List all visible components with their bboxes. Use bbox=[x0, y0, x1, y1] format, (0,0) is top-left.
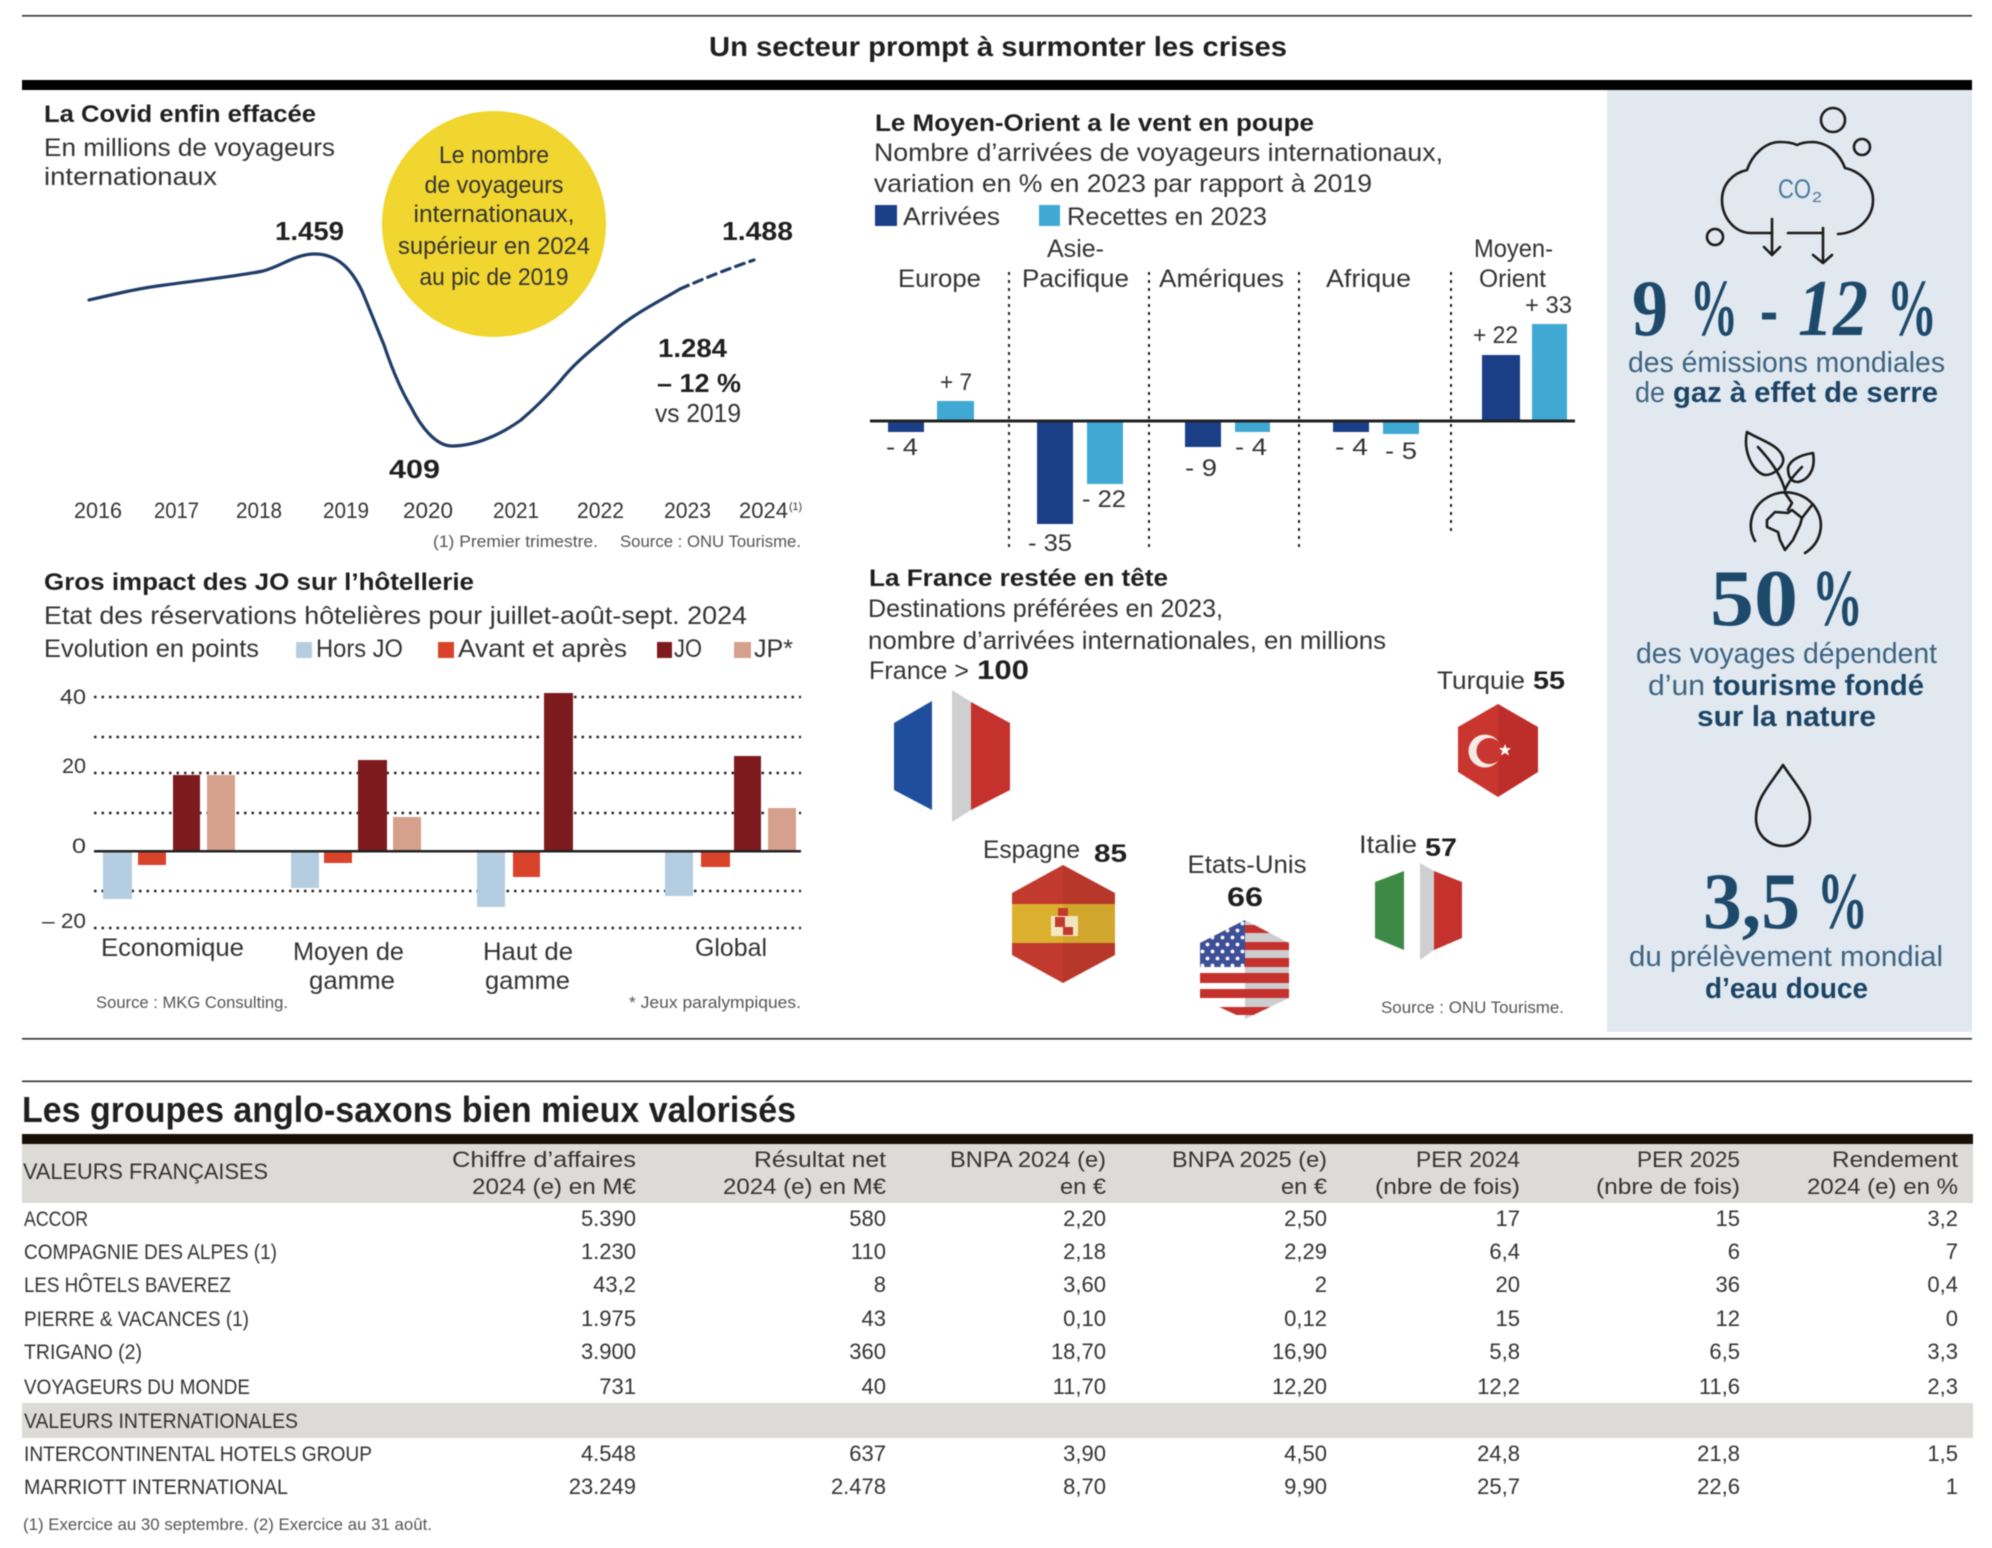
bars: Global bbox=[665, 756, 796, 896]
stat: 3,5 %: d’eau douce bbox=[1705, 973, 1868, 1005]
stat: 9-12 % bbox=[1628, 265, 1945, 409]
heading: table title: Les groupes anglo-saxons bien mieux valorisés bbox=[22, 1089, 796, 1130]
table row: Les Hôtels Baverez: 2 bbox=[1315, 1272, 1327, 1297]
table header: 2024 (e) en % bbox=[1807, 1174, 1958, 1199]
region labels: Amériques bbox=[1159, 265, 1284, 293]
top section header bbox=[22, 15, 1972, 90]
table row: InterContinental: 3,90 bbox=[1063, 1441, 1106, 1466]
icon: plant on globe bbox=[1746, 432, 1821, 553]
y axis labels: 20 bbox=[62, 755, 86, 778]
table row: Accor: 15 bbox=[1716, 1206, 1740, 1231]
table row: Accor: 5.390 bbox=[581, 1206, 636, 1231]
table row: Pierre & Vacances: 0,12 bbox=[1284, 1306, 1327, 1331]
label: Espagne: 85 bbox=[1094, 840, 1127, 868]
stat: 50 %: 50 bbox=[1710, 555, 1798, 643]
subtitle: destinations: nombre d’arrivées internationales, en millions bbox=[868, 627, 1386, 655]
table row: Compagnie des Alpes: 2,29 bbox=[1284, 1239, 1327, 1264]
stat: 9-12 %: 12 bbox=[1798, 265, 1868, 353]
stat: 3,5 %: % bbox=[1817, 858, 1868, 946]
region labels: Pacifique bbox=[1022, 265, 1129, 293]
table row: Compagnie des Alpes: 1.230 bbox=[581, 1239, 636, 1264]
stat: 3,5 % bbox=[1629, 858, 1943, 1005]
table row: Trigano: 16,90 bbox=[1272, 1339, 1327, 1364]
legend: Hors JO bbox=[316, 635, 403, 663]
table row: InterContinental: 4.548 bbox=[581, 1441, 636, 1466]
table row: Compagnie des Alpes: 6 bbox=[1728, 1239, 1740, 1264]
table row: Accor bbox=[24, 1206, 1958, 1231]
x axis years: (1) bbox=[789, 501, 802, 513]
stat: 3,5 %: du prélèvement mondial bbox=[1629, 941, 1943, 973]
table header: (nbre de fois) bbox=[1375, 1174, 1520, 1199]
stat: 9-12 %: - bbox=[1760, 265, 1778, 353]
legend: JP* bbox=[754, 635, 793, 663]
panel: line chart La Covid enfin effacée bbox=[44, 101, 802, 551]
table row: Compagnie des Alpes: 7 bbox=[1946, 1239, 1958, 1264]
stat: 50 %: tourisme fondé bbox=[1713, 670, 1924, 702]
data labels: 1.459 bbox=[275, 216, 344, 246]
source note: Source : ONU Tourisme. bbox=[620, 532, 801, 551]
table row: Voyageurs du Monde: 12,2 bbox=[1477, 1374, 1520, 1399]
table row: InterContinental: 24,8 bbox=[1477, 1441, 1520, 1466]
table section: Valeurs internationales: VALEURS INTERNATIONALES bbox=[24, 1410, 298, 1433]
icon: France flag bbox=[894, 690, 1010, 822]
value labels: - 4 bbox=[886, 434, 918, 461]
x axis years: 2020 bbox=[403, 498, 453, 523]
icon: CO2 cloud bbox=[1707, 108, 1873, 263]
table row: Les Hôtels Baverez: 43,2 bbox=[593, 1272, 636, 1297]
x axis years bbox=[74, 498, 802, 523]
table header: (nbre de fois) bbox=[1596, 1174, 1740, 1199]
value labels: + 7 bbox=[940, 369, 972, 396]
icon: CO2 cloud: CO bbox=[1778, 174, 1811, 204]
table footnote: (1) Exercice au 30 septembre. (2) Exercice au 31 août. bbox=[23, 1515, 432, 1534]
value labels: - 5 bbox=[1385, 438, 1417, 465]
y axis labels: 0 bbox=[72, 835, 86, 858]
x axis years: 2017 bbox=[154, 498, 199, 523]
table row: Marriott: 9,90 bbox=[1284, 1474, 1327, 1499]
table header: Rendement bbox=[1832, 1147, 1958, 1172]
label: France: 100 bbox=[977, 655, 1029, 685]
table row: Les Hôtels Baverez: 36 bbox=[1716, 1272, 1740, 1297]
label: France: France > bbox=[869, 657, 969, 685]
table row: InterContinental bbox=[24, 1441, 1958, 1466]
label: Italie: Italie bbox=[1359, 831, 1417, 859]
table row: InterContinental: 637 bbox=[849, 1441, 886, 1466]
main title: Un secteur prompt à surmonter les crises bbox=[709, 31, 1287, 62]
table row: Pierre & Vacances: 0,10 bbox=[1063, 1306, 1106, 1331]
icon: water drop bbox=[1756, 765, 1810, 846]
icon: Italy flag bbox=[1375, 863, 1462, 960]
table row: Les Hôtels Baverez: LES HÔTELS BAVEREZ bbox=[24, 1274, 231, 1297]
y axis labels bbox=[42, 686, 86, 933]
table row: Accor: 2,20 bbox=[1063, 1206, 1106, 1231]
heading: Gros impact: Gros impact des JO sur l’hôtellerie bbox=[44, 569, 474, 596]
table row: Marriott: 25,7 bbox=[1477, 1474, 1520, 1499]
table row: Trigano: 6,5 bbox=[1709, 1339, 1740, 1364]
category labels bbox=[101, 934, 767, 995]
y axis labels: 40 bbox=[60, 686, 86, 709]
panel: bar chart Moyen-Orient bbox=[870, 110, 1575, 557]
label: Etats-Unis: Etats-Unis bbox=[1188, 851, 1306, 879]
table row: InterContinental: 21,8 bbox=[1697, 1441, 1740, 1466]
table row: Marriott: 1 bbox=[1946, 1474, 1958, 1499]
subtitle: arrivées: variation en % en 2023 par rapport à 2019 bbox=[874, 170, 1372, 198]
value labels: - 22 bbox=[1082, 486, 1126, 513]
table row: Pierre & Vacances: 15 bbox=[1496, 1306, 1520, 1331]
table row: Trigano: TRIGANO (2) bbox=[24, 1341, 142, 1364]
x axis years: 2022 bbox=[577, 498, 624, 523]
source note: (1) Premier trimestre. bbox=[433, 532, 598, 551]
data labels: 1.488 bbox=[722, 216, 793, 246]
x axis years: 2018 bbox=[236, 498, 282, 523]
stat: 50 %: des voyages dépendent bbox=[1636, 638, 1937, 670]
table row: Trigano: 3.900 bbox=[581, 1339, 636, 1364]
label: Espagne: Espagne bbox=[983, 836, 1080, 864]
region labels: Afrique bbox=[1326, 265, 1411, 293]
table header: Résultat net bbox=[754, 1147, 886, 1172]
table row: Marriott: 2.478 bbox=[831, 1474, 886, 1499]
value labels: - 4 bbox=[1335, 434, 1368, 461]
panel: environmental figures bbox=[1607, 90, 1972, 1032]
value labels: - 4 bbox=[1235, 434, 1267, 461]
label: Etats-Unis: 66 bbox=[1227, 882, 1263, 912]
x axis years: 2023 bbox=[664, 498, 711, 523]
callout: yellow circle: de voyageurs bbox=[424, 172, 564, 199]
subtitle: état des réservations: Etat des réservations hôtelières pour juillet-août-sept. 2024 bbox=[44, 602, 747, 630]
table header: 2024 (e) en M€ bbox=[723, 1174, 886, 1199]
table row: Compagnie des Alpes: 110 bbox=[851, 1239, 886, 1264]
legend: Arrivées bbox=[903, 203, 1000, 231]
source notes: Source : MKG Consulting. bbox=[96, 993, 288, 1012]
stat: 9-12 %: 9 bbox=[1632, 265, 1668, 353]
source notes bbox=[96, 993, 801, 1012]
subtitle: arrivées bbox=[874, 139, 1443, 198]
region labels: Orient bbox=[1479, 265, 1546, 293]
bars: Moyen de gamme bbox=[291, 760, 421, 888]
region labels bbox=[898, 235, 1553, 293]
x axis years: 2016 bbox=[74, 498, 122, 523]
category labels: Haut de bbox=[483, 938, 573, 966]
table header: en € bbox=[1281, 1174, 1327, 1199]
value labels: + 33 bbox=[1525, 292, 1572, 319]
table row: Voyageurs du Monde: 2,3 bbox=[1927, 1374, 1958, 1399]
category labels: gamme bbox=[485, 967, 570, 995]
table row: Trigano: 3,3 bbox=[1927, 1339, 1958, 1364]
callout: yellow circle: Le nombre bbox=[439, 142, 549, 169]
table row: Voyageurs du Monde: 11,6 bbox=[1699, 1374, 1740, 1399]
table header: BNPA 2024 (e) bbox=[950, 1147, 1106, 1172]
table row: Trigano: 5,8 bbox=[1489, 1339, 1520, 1364]
panel: La France restée en tête bbox=[868, 565, 1565, 1020]
table row: Les Hôtels Baverez: 3,60 bbox=[1063, 1272, 1106, 1297]
table row: Les Hôtels Baverez bbox=[24, 1272, 1958, 1297]
callout: yellow circle: internationaux, bbox=[414, 201, 574, 228]
legend: JO bbox=[674, 635, 702, 663]
table header: 2024 (e) en M€ bbox=[472, 1174, 636, 1199]
table row: Pierre & Vacances: 1.975 bbox=[581, 1306, 636, 1331]
table row: Compagnie des Alpes bbox=[24, 1239, 1958, 1264]
data labels: – 12 % bbox=[657, 368, 741, 398]
table row: Accor: ACCOR bbox=[24, 1208, 88, 1231]
region labels: Moyen- bbox=[1474, 235, 1553, 263]
data labels: 409 bbox=[389, 454, 440, 484]
table row: Voyageurs du Monde: 731 bbox=[599, 1374, 636, 1399]
table row: Accor: 3,2 bbox=[1927, 1206, 1958, 1231]
source notes: * Jeux paralympiques. bbox=[629, 993, 801, 1012]
category labels: gamme bbox=[309, 967, 395, 995]
label: Turquie: 55 bbox=[1533, 667, 1565, 695]
x axis years: 2019 bbox=[323, 498, 369, 523]
icon: CO2 cloud: 2 bbox=[1812, 189, 1822, 206]
legend: Avant et après bbox=[458, 635, 627, 663]
stat: 3,5 %: 3,5 bbox=[1703, 858, 1800, 946]
label: France bbox=[869, 655, 1029, 685]
table row: Les Hôtels Baverez: 20 bbox=[1496, 1272, 1520, 1297]
table row: Voyageurs du Monde: 40 bbox=[862, 1374, 886, 1399]
table header: BNPA 2025 (e) bbox=[1172, 1147, 1327, 1172]
heading: Moyen-Orient: Le Moyen-Orient a le vent en poupe bbox=[875, 110, 1314, 137]
table row: Accor: 580 bbox=[849, 1206, 886, 1231]
source note bbox=[433, 532, 801, 551]
value labels bbox=[886, 292, 1572, 557]
stat: 50 %: sur la nature bbox=[1697, 701, 1876, 733]
table row: Pierre & Vacances: 43 bbox=[862, 1306, 886, 1331]
table row: Trigano bbox=[24, 1339, 1958, 1364]
data labels: 1.284 bbox=[658, 333, 728, 363]
table row: Les Hôtels Baverez: 0,4 bbox=[1927, 1272, 1958, 1297]
stat: 9-12 %: des émissions mondiales bbox=[1628, 347, 1945, 379]
stat: 9-12 %: % bbox=[1690, 265, 1738, 353]
legend: Evolution en points bbox=[44, 635, 259, 663]
table header: en € bbox=[1060, 1174, 1106, 1199]
table row: Trigano: 360 bbox=[849, 1339, 886, 1364]
label: Italie bbox=[1359, 831, 1457, 862]
data labels bbox=[275, 216, 793, 484]
callout: yellow circle: au pic de 2019 bbox=[420, 264, 568, 291]
value labels: - 9 bbox=[1185, 455, 1217, 482]
bars: Economique bbox=[103, 775, 235, 899]
table row: Voyageurs du Monde: VOYAGEURS DU MONDE bbox=[24, 1376, 250, 1399]
bars: arrivées bbox=[888, 355, 1520, 524]
y axis labels: – 20 bbox=[42, 910, 86, 933]
legend bbox=[875, 203, 1267, 231]
table row: Trigano: 18,70 bbox=[1051, 1339, 1106, 1364]
table header: PER 2025 bbox=[1637, 1147, 1740, 1172]
table row: Compagnie des Alpes: 2,18 bbox=[1063, 1239, 1106, 1264]
table row: Pierre & Vacances: PIERRE & VACANCES (1) bbox=[24, 1308, 249, 1331]
source note: Source : ONU Tourisme. bbox=[1381, 998, 1564, 1017]
heading: La Covid: La Covid enfin effacée bbox=[44, 101, 316, 128]
subtitle: destinations bbox=[868, 595, 1386, 655]
bars: Haut de gamme bbox=[477, 693, 573, 907]
legend bbox=[44, 635, 793, 663]
icon: USA flag bbox=[1200, 920, 1290, 1020]
stat: 50 % bbox=[1636, 555, 1937, 733]
stat: 9-12 %: gaz à effet de serre bbox=[1673, 377, 1938, 409]
heading: France: La France restée en tête bbox=[869, 565, 1168, 592]
label: Turquie: Turquie bbox=[1437, 667, 1525, 695]
table row: InterContinental: INTERCONTINENTAL HOTELS GROUP bbox=[24, 1443, 372, 1466]
table row: Marriott: 23.249 bbox=[569, 1474, 636, 1499]
table row: Compagnie des Alpes: COMPAGNIE DES ALPES (1) bbox=[24, 1241, 277, 1264]
subtitle: destinations: Destinations préférées en 2023, bbox=[868, 595, 1223, 623]
table header bbox=[22, 1144, 1973, 1203]
label: Turquie bbox=[1437, 667, 1565, 695]
x axis years: 2024 bbox=[739, 498, 788, 523]
callout: yellow circle: supérieur en 2024 bbox=[398, 233, 590, 260]
region labels: Asie- bbox=[1047, 235, 1104, 263]
table section: Valeurs internationales bbox=[22, 1403, 1973, 1438]
icon: Spain flag bbox=[1012, 865, 1115, 983]
table row: Pierre & Vacances bbox=[24, 1306, 1958, 1331]
table row: Voyageurs du Monde: 11,70 bbox=[1053, 1374, 1106, 1399]
table header: Chiffre d’affaires bbox=[452, 1147, 636, 1172]
table row: Marriott bbox=[24, 1474, 1958, 1499]
table row: InterContinental: 1,5 bbox=[1927, 1441, 1958, 1466]
value labels: + 22 bbox=[1473, 322, 1518, 349]
table row: Marriott: MARRIOTT INTERNATIONAL bbox=[24, 1476, 288, 1499]
table row: Marriott: 22,6 bbox=[1697, 1474, 1740, 1499]
label: Etats-Unis bbox=[1188, 851, 1306, 912]
data labels: vs 2019 bbox=[655, 398, 741, 428]
callout: yellow circle bbox=[382, 111, 606, 337]
table row: Voyageurs du Monde bbox=[24, 1374, 1958, 1399]
stat: 50 %: d’un bbox=[1648, 670, 1705, 702]
table row: Pierre & Vacances: 12 bbox=[1716, 1306, 1740, 1331]
label: Espagne bbox=[983, 836, 1127, 868]
value labels: - 35 bbox=[1028, 530, 1072, 557]
stat: 9-12 %: de bbox=[1635, 377, 1665, 409]
category labels: Moyen de bbox=[293, 938, 404, 966]
panel: bar chart JO hôtellerie bbox=[42, 569, 801, 1012]
subtitle: millions de voyageurs: En millions de voyageurs bbox=[44, 134, 335, 162]
table row: Voyageurs du Monde: 12,20 bbox=[1272, 1374, 1327, 1399]
subtitle: millions de voyageurs: internationaux bbox=[44, 163, 218, 191]
category labels: Global bbox=[695, 934, 767, 962]
legend: Recettes en 2023 bbox=[1067, 203, 1267, 231]
icon: Turkey flag bbox=[1458, 704, 1538, 798]
table row: Accor: 17 bbox=[1496, 1206, 1520, 1231]
x axis years: 2021 bbox=[493, 498, 539, 523]
table row: Pierre & Vacances: 0 bbox=[1946, 1306, 1958, 1331]
line: travellers curve bbox=[89, 254, 754, 446]
subtitle: millions de voyageurs bbox=[44, 134, 335, 191]
table row: Accor: 2,50 bbox=[1284, 1206, 1327, 1231]
label: Italie: 57 bbox=[1425, 834, 1457, 862]
stat: 9-12 %: % bbox=[1887, 265, 1937, 353]
panel: valuation table bbox=[22, 1080, 1973, 1534]
table row: Compagnie des Alpes: 6,4 bbox=[1489, 1239, 1520, 1264]
table header: VALEURS FRANÇAISES bbox=[23, 1159, 268, 1184]
table header: PER 2024 bbox=[1416, 1147, 1520, 1172]
bars: recettes bbox=[937, 324, 1567, 484]
table row: InterContinental: 4,50 bbox=[1284, 1441, 1327, 1466]
region labels: Europe bbox=[898, 265, 981, 293]
table row: Marriott: 8,70 bbox=[1063, 1474, 1106, 1499]
category labels: Economique bbox=[101, 934, 244, 962]
table row: Les Hôtels Baverez: 8 bbox=[874, 1272, 886, 1297]
subtitle: arrivées: Nombre d’arrivées de voyageurs internationaux, bbox=[874, 139, 1443, 167]
stat: 50 %: % bbox=[1812, 555, 1863, 643]
